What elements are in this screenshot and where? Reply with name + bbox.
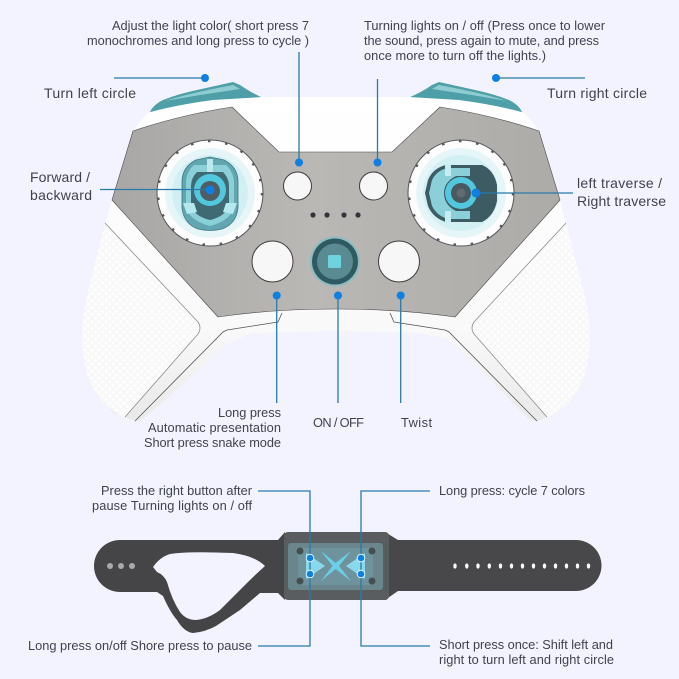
label: turn left circle: Turn left circle xyxy=(44,85,136,101)
buckle right arrow xyxy=(346,553,365,579)
center power button xyxy=(310,236,360,286)
label: turning lights on/off: Turning lights on / off (Press once to lower xyxy=(364,18,606,33)
right shoulder trigger xyxy=(408,82,522,112)
label: long press modes: Automatic presentation xyxy=(148,420,281,435)
left seam xyxy=(135,313,282,421)
right grip seam xyxy=(472,223,566,417)
label: forward / backward xyxy=(30,169,92,203)
right stick housing xyxy=(425,165,497,222)
LED indicator dots xyxy=(310,212,361,218)
label: press right button: pause Turning lights on / off xyxy=(92,498,252,513)
label: press right button: Press the right button after xyxy=(101,483,253,498)
label: short press once: Short press once: Shift left and xyxy=(439,637,613,652)
label: cycle 7 colors: Long press: cycle 7 colors xyxy=(439,483,585,498)
label: turning lights on/off xyxy=(364,18,606,63)
big button right xyxy=(378,241,420,282)
leader lines xyxy=(100,52,585,646)
controller body xyxy=(81,97,590,421)
label: adjust light color: Adjust the light color( short press 7 xyxy=(112,18,309,33)
label: long press modes xyxy=(144,405,281,450)
strap left holes xyxy=(107,563,135,569)
label: short press once: right to turn left and right circle xyxy=(439,652,614,667)
label: left / right traverse: left traverse / xyxy=(577,175,662,191)
strap right band xyxy=(385,532,602,600)
controller xyxy=(81,82,590,421)
right stick cap xyxy=(445,177,477,209)
left grip seam xyxy=(105,223,200,417)
left grip xyxy=(82,223,200,417)
buckle X mark xyxy=(321,551,351,581)
label: left / right traverse xyxy=(577,175,666,209)
label: forward / backward: backward xyxy=(30,187,92,203)
strap left loop xyxy=(94,532,285,633)
right joystick xyxy=(408,140,514,246)
right grip xyxy=(472,223,590,417)
left joystick xyxy=(157,140,263,246)
left stick housing xyxy=(182,157,238,230)
label: press right button xyxy=(92,483,253,513)
callout dots xyxy=(201,74,500,578)
right seam xyxy=(390,313,537,421)
label: on / off: ON / OFF xyxy=(313,415,364,430)
label: long press modes: Long press xyxy=(218,405,281,420)
label: adjust light color xyxy=(87,18,309,48)
left shoulder trigger xyxy=(150,82,263,112)
strap right holes xyxy=(453,563,590,569)
label: adjust light color: monochromes and long press to cycle ) xyxy=(87,33,309,48)
right stick glow xyxy=(416,148,506,238)
label: short press once xyxy=(439,637,614,667)
label: long press modes: Short press snake mode xyxy=(144,435,281,450)
small button right xyxy=(360,172,388,200)
label: long press on/off: Long press on/off Shore press to pause xyxy=(28,638,252,653)
small button left xyxy=(284,172,312,200)
left stick cap xyxy=(194,174,226,206)
strap buckle xyxy=(284,532,389,600)
label: twist: Twist xyxy=(401,415,432,430)
label: turn right circle: Turn right circle xyxy=(547,85,647,101)
buckle left arrow xyxy=(306,553,325,579)
big button left xyxy=(252,241,293,282)
label: turning lights on/off: the sound, press again to mute, and press xyxy=(364,33,599,48)
grey faceplate xyxy=(112,107,560,317)
label: turning lights on/off: once more to turn off the lights.) xyxy=(364,48,546,63)
right stick ring xyxy=(408,140,514,246)
wrist strap xyxy=(94,532,602,633)
left stick ring xyxy=(157,140,263,246)
label: left / right traverse: Right traverse xyxy=(577,193,666,209)
label: forward / backward: Forward / xyxy=(30,169,90,185)
left stick glow xyxy=(165,148,255,238)
